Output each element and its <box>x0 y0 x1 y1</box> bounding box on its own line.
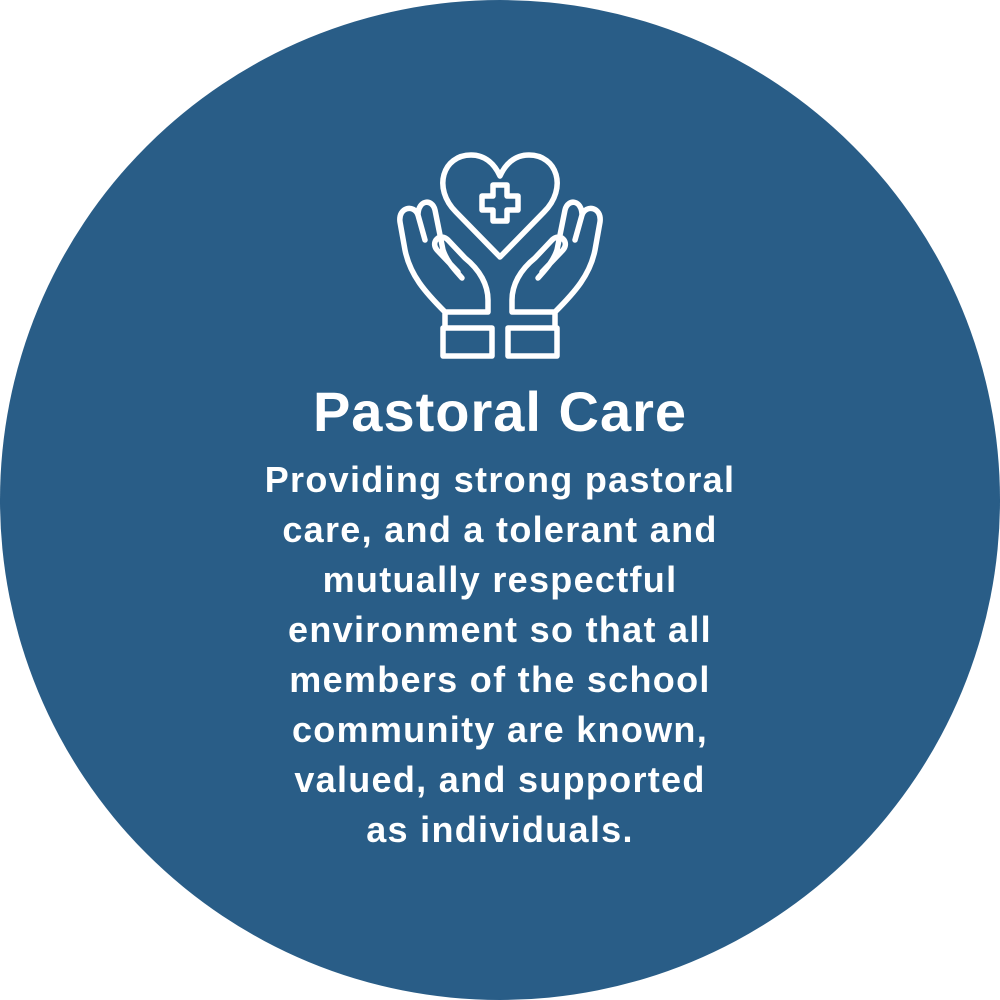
body text: environment so that all <box>288 609 712 650</box>
body text: community are known, <box>292 709 708 750</box>
body text: care, and a tolerant and <box>282 509 718 550</box>
title: Pastoral Care <box>313 380 687 443</box>
body text: mutually respectful <box>323 559 677 600</box>
body text: as individuals. <box>366 809 634 850</box>
body text <box>265 459 735 850</box>
body text: Providing strong pastoral <box>265 459 735 500</box>
body text: members of the school <box>289 659 711 700</box>
body text: valued, and supported <box>294 759 706 800</box>
